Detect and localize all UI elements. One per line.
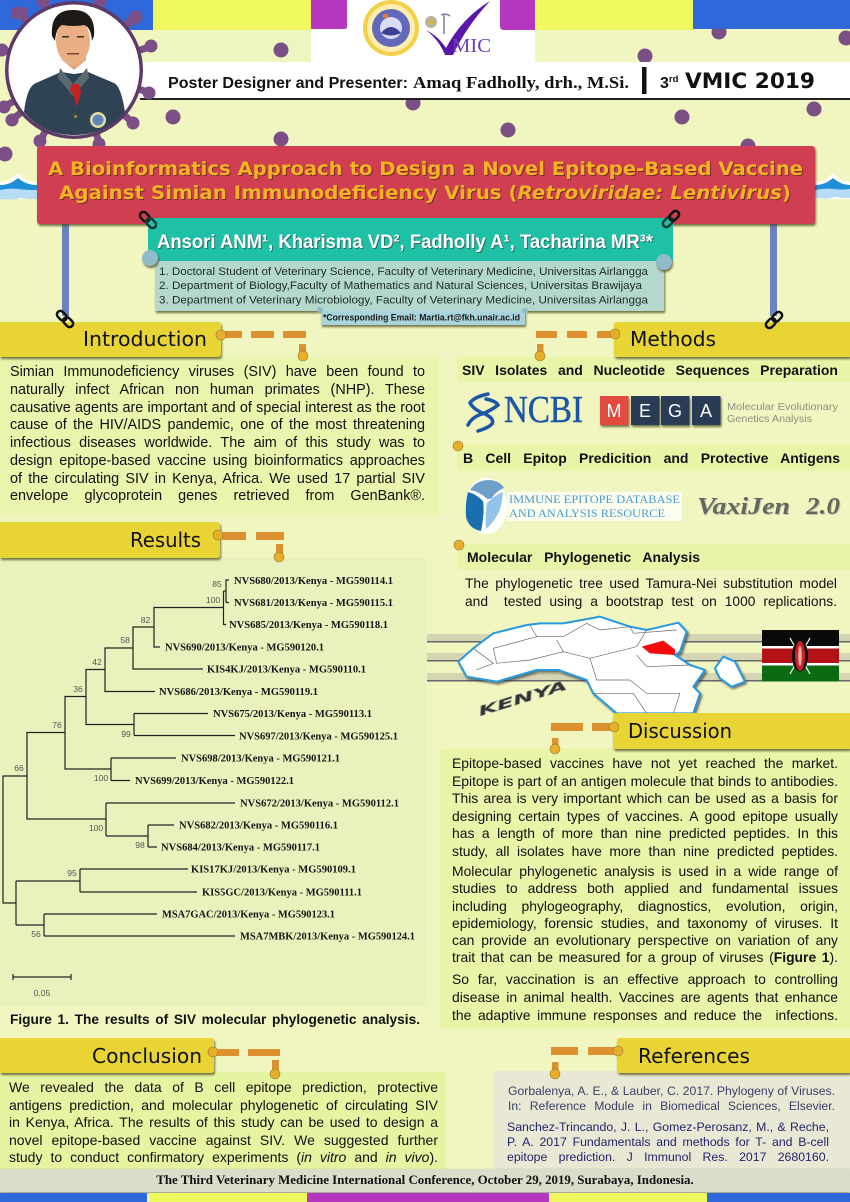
taxon labels: MSA7MBK/2013/Kenya - MG590124.1 xyxy=(240,932,415,942)
bootstrap values: 100 xyxy=(206,595,220,605)
map of Africa with Kenya highlighted xyxy=(458,617,745,713)
text block: introduction: causative agents are important and of special interest as the root xyxy=(10,400,425,416)
bottom colour bars xyxy=(0,1193,850,1202)
reference 2 xyxy=(507,1120,829,1164)
logo: MEGA: M xyxy=(606,401,622,421)
presenter line: rd xyxy=(669,74,679,85)
affiliations: 2. Department of Biology,Faculty of Mathematics and Natural Sciences, Universitas Brawijaya xyxy=(159,280,643,292)
presenter portrait xyxy=(0,0,158,150)
text block: discussion paragraph 2: Molecular phylogenetic analysis is used in a wide range of xyxy=(452,863,838,879)
connector: Results xyxy=(213,530,284,562)
reference 1 xyxy=(508,1084,835,1113)
presenter line: Amaq Fadholly, drh., M.Si. xyxy=(413,73,629,92)
footer band: The Third Veterinary Medicine International Conference, October 29, 2019, Surabaya, Indonesia. xyxy=(156,1173,694,1187)
bootstrap values xyxy=(14,579,222,939)
logo: IEDB: AND ANALYSIS RESOURCE xyxy=(509,506,665,520)
taxon labels: NVS684/2013/Kenya - MG590117.1 xyxy=(161,842,320,854)
logo: NCBI: NCBI xyxy=(504,389,583,431)
header: Conclusion: Conclusion xyxy=(92,1044,202,1068)
text block: introduction: naturally infect African non human primates (NHP). These xyxy=(10,382,425,398)
text block: introduction: infectious diseases worldwide. The aim of this study was to xyxy=(10,435,425,451)
logo: VMIC xyxy=(425,1,491,57)
text block: discussion paragraph 1: study, all isolates have more than nine predicted peptides. xyxy=(452,842,838,858)
bootstrap values: 76 xyxy=(52,720,62,730)
header: Introduction: Introduction xyxy=(83,327,207,351)
text block: discussion paragraph 1: designing certain types of vaccines. A good epitope usually xyxy=(452,808,838,824)
panel: methods strip 3 xyxy=(457,544,850,570)
taxon labels: NVS699/2013/Kenya - MG590122.1 xyxy=(135,776,294,787)
bootstrap values: 42 xyxy=(92,657,102,667)
taxon labels: KIS5GC/2013/Kenya - MG590111.1 xyxy=(202,888,362,898)
header: Results xyxy=(0,522,220,558)
taxon labels: KIS17KJ/2013/Kenya - MG590109.1 xyxy=(191,864,356,876)
bootstrap values: 56 xyxy=(31,929,41,939)
text block: discussion paragraph 1 xyxy=(452,755,838,859)
logo: VaxiJen xyxy=(697,494,840,520)
bootstrap values: 99 xyxy=(121,729,131,739)
text block: conclusion: novel epitope-based vaccine against SIV. We suggested further xyxy=(9,1132,438,1148)
logo: university seal xyxy=(363,0,419,56)
reference 2: Sanchez-Trincando, J. L., Gomez-Perosanz, M., & Reche, xyxy=(507,1120,829,1134)
footer band xyxy=(0,1169,850,1192)
reference 1: In: Reference Module in Biomedical Sciences, Elsevier. xyxy=(508,1099,835,1113)
text block: phylogenetic method: and tested using a bootstrap test on 1000 replications. xyxy=(465,594,837,609)
panel: methods strip 2 xyxy=(457,445,850,471)
taxon labels: NVS682/2013/Kenya - MG590116.1 xyxy=(179,820,338,832)
connector: Discussion xyxy=(550,722,619,754)
text block: discussion paragraph 1: has a length of more than nine predicted peptides. In this xyxy=(452,825,838,841)
bootstrap values: 36 xyxy=(73,684,83,694)
bootstrap values: 95 xyxy=(67,868,77,878)
header: Results: Results xyxy=(130,528,201,552)
flag of Kenya xyxy=(762,630,839,682)
heading: molecular phylogenetic analysis: Molecular Phylogenetic Analysis xyxy=(467,549,700,565)
text block: introduction: of the circulating SIV in Kenya, Africa. We used 17 partial SIV xyxy=(10,470,425,486)
title banner: A Bioinformatics Approach to Design a Novel Epitope-Based Vaccine xyxy=(48,158,803,180)
text block: discussion paragraph 2: can provide an evolutionary perspective on variation of any xyxy=(452,932,838,948)
bootstrap values: 82 xyxy=(141,615,150,625)
taxon labels: NVS672/2013/Kenya - MG590112.1 xyxy=(240,798,399,810)
text block: phylogenetic method xyxy=(465,576,837,609)
logo: MEGA: A xyxy=(700,401,712,421)
text block: discussion paragraph 2: trait that can be measured for a group of viruses (Figure 1). xyxy=(452,949,838,965)
logo: IEDB xyxy=(465,478,682,534)
logo: MEGA: G xyxy=(668,401,682,421)
text block: conclusion: antigens prediction, and molecular phylogenetic of circulating SIV xyxy=(9,1096,438,1112)
heading: B cell epitope: B Cell Epitop Predicition and Protective Antigens xyxy=(463,450,840,466)
text block: discussion paragraph 1: Epitope-based vaccines have not yet reached the market. xyxy=(452,755,838,771)
heading: SIV isolates: SIV Isolates and Nucleotide Sequences Preparation xyxy=(462,362,838,378)
header: References: References xyxy=(638,1044,750,1068)
text block: introduction: cause of the HIV/AIDS pandemic, one of the most threatening xyxy=(10,417,425,433)
bootstrap values: 66 xyxy=(14,763,24,773)
panel: results xyxy=(0,558,427,1006)
text block: conclusion: in Kenya, Africa. The results of this study can be used to design a xyxy=(9,1114,438,1130)
text block: conclusion xyxy=(9,1079,438,1165)
reference 2: epitope prediction. J Immunol Res. 2017 2680160. xyxy=(507,1150,829,1164)
taxon labels: NVS681/2013/Kenya - MG590115.1 xyxy=(234,598,393,609)
header: References xyxy=(617,1038,850,1073)
header: Introduction xyxy=(0,322,221,357)
presenter line: 3 xyxy=(660,75,669,92)
methods bullets xyxy=(453,441,464,550)
affiliations: 1. Doctoral Student of Veterinary Science, Faculty of Veterinary Medicine, Universitas Airlangga xyxy=(159,266,649,278)
text block: introduction: design epitope-based vaccine using bioinformatics approaches xyxy=(10,453,425,469)
panel: references xyxy=(493,1071,850,1171)
taxon labels: NVS675/2013/Kenya - MG590113.1 xyxy=(213,709,372,720)
logo: IEDB: IMMUNE EPITOPE DATABASE xyxy=(509,492,680,506)
text block: discussion paragraph 1: Epitope is part of an antigen molecule that binds to antibodies. xyxy=(452,772,838,788)
header: Discussion xyxy=(613,713,850,749)
taxon labels: NVS698/2013/Kenya - MG590121.1 xyxy=(181,754,340,764)
connector: References xyxy=(550,1046,623,1079)
text block: discussion paragraph 2 xyxy=(452,863,838,965)
connector: Introduction xyxy=(216,330,308,361)
text block: discussion paragraph 3: disease in animal health. Vaccines are agents that enhance xyxy=(452,989,838,1005)
taxon labels: NVS686/2013/Kenya - MG590119.1 xyxy=(159,687,318,698)
text block: discussion paragraph 1: This area is very important which can be used as a basis for xyxy=(452,790,838,806)
taxon labels xyxy=(135,576,415,942)
taxon labels: NVS690/2013/Kenya - MG590120.1 xyxy=(165,642,324,654)
taxon labels: NVS697/2013/Kenya - MG590125.1 xyxy=(239,732,398,742)
presenter line: Poster Designer and Presenter: xyxy=(168,75,408,92)
text block: phylogenetic method: The phylogenetic tree used Tamura-Nei substitution model xyxy=(465,576,837,591)
logo: VaxiJen: 2.0 xyxy=(805,494,840,520)
affiliations: 3. Department of Veterinary Microbiology, Faculty of Veterinary Medicine, Universitas Airlangga xyxy=(159,294,649,306)
scale bar xyxy=(13,974,71,998)
authors banner: Ansori ANM¹, Kharisma VD², Fadholly A¹, Tacharina MR³* xyxy=(157,232,654,253)
bootstrap values: 98 xyxy=(135,840,145,850)
corresponding email xyxy=(317,307,528,325)
title banner: Against Simian Immunodeficiency Virus ( Retroviridae: Lentivirus ) xyxy=(59,182,791,204)
logo: MEGA xyxy=(600,396,839,425)
text block: introduction: envelope glycoprotein genes retrieved from GenBank®. xyxy=(10,488,425,504)
taxon labels: NVS680/2013/Kenya - MG590114.1 xyxy=(234,576,393,587)
text block: conclusion: We revealed the data of B cell epitope prediction, protective xyxy=(9,1079,438,1095)
text block: discussion paragraph 3: So far, vaccination is an effective approach to controlling xyxy=(452,971,838,987)
logo: VaxiJen: VaxiJen xyxy=(697,494,790,520)
logo: NCBI xyxy=(468,389,583,431)
tree branches xyxy=(3,580,235,936)
bootstrap values: 100 xyxy=(94,773,108,783)
panel: conclusion xyxy=(0,1072,446,1175)
text block: discussion paragraph 3 xyxy=(452,971,838,1023)
header: Methods: Methods xyxy=(630,327,716,351)
Kenya label: KENYA xyxy=(477,679,569,720)
header: Discussion: Discussion xyxy=(628,719,732,743)
header: Methods xyxy=(614,322,850,357)
bootstrap values: 58 xyxy=(120,635,130,645)
text block: conclusion: study to conduct confirmatory experiments (in vitro and in vivo). xyxy=(9,1149,438,1165)
corresponding email: *Corresponding Email: Martia.rt@fkh.unair.ac.id xyxy=(323,312,520,322)
logo: MEGA: Molecular Evolutionary xyxy=(727,401,839,413)
text block: discussion paragraph 2: studies to address both applied and fundamental issues xyxy=(452,880,838,896)
bootstrap values: 85 xyxy=(212,579,222,589)
connector: Methods xyxy=(535,329,620,361)
text block: discussion paragraph 2: including phylogeography, diagnostics, evolution, origin, xyxy=(452,898,838,914)
presenter line xyxy=(168,67,815,94)
text block: introduction: Simian Immunodeficiency viruses (SIV) have been found to xyxy=(10,364,425,380)
text block: discussion paragraph 3: the adaptive immune responses and reduce the infections. xyxy=(452,1007,838,1023)
taxon labels: MSA7GAC/2013/Kenya - MG590123.1 xyxy=(162,910,335,920)
text block: introduction xyxy=(10,364,425,504)
presenter line: VMIC 2019 xyxy=(685,69,815,93)
authors banner xyxy=(148,218,673,261)
panel: methods strip 1 xyxy=(457,357,850,382)
logo: MEGA: Genetics Analysis xyxy=(727,413,812,425)
logo: VMIC: MIC xyxy=(452,35,491,57)
logo: MEGA: E xyxy=(639,401,651,421)
figure caption: Figure 1. The results of SIV molecular phylogenetic analysis. xyxy=(10,1012,420,1027)
chart: phylogenetic tree xyxy=(3,576,415,998)
header: Conclusion xyxy=(0,1038,214,1073)
taxon labels: KIS4KJ/2013/Kenya - MG590110.1 xyxy=(207,664,366,676)
panel: introduction xyxy=(0,357,439,515)
panel: discussion xyxy=(440,749,850,1029)
text block: discussion paragraph 2: epidemiology, forensic studies, and taxonomy of viruses. It xyxy=(452,915,838,931)
title banner xyxy=(37,146,815,224)
icon: chain links xyxy=(55,209,784,330)
scale bar: 0.05 xyxy=(34,988,51,998)
taxon labels: NVS685/2013/Kenya - MG590118.1 xyxy=(229,620,388,631)
affiliations xyxy=(142,250,672,311)
reference 2: P. A. 2017 Fundamentals and methods for T- and B-cell xyxy=(507,1135,829,1149)
reference 1: Gorbalenya, A. E., & Lauber, C. 2017. Phylogeny of Viruses. xyxy=(508,1084,835,1098)
connector: Conclusion xyxy=(208,1047,280,1079)
bootstrap values: 100 xyxy=(89,823,103,833)
